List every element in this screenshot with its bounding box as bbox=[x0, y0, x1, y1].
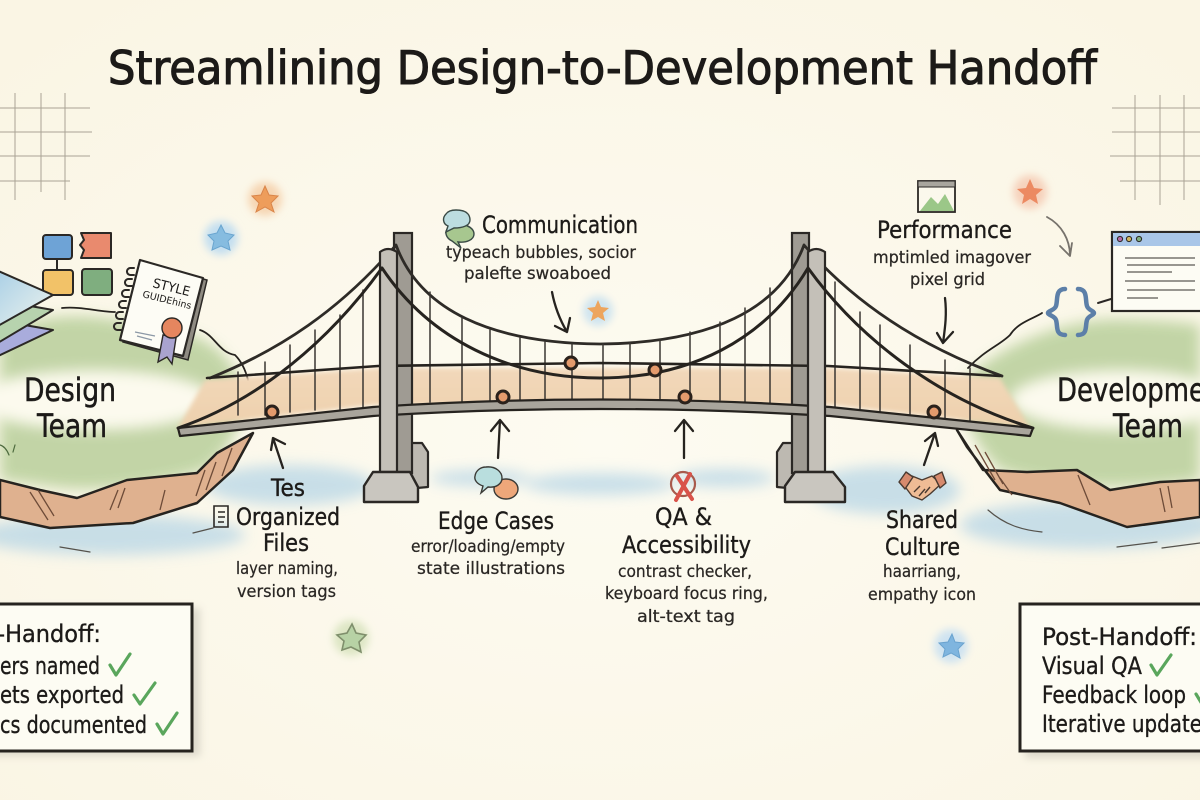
checkmarks bbox=[1151, 655, 1200, 704]
block: edge cases: error/loading/empty bbox=[411, 537, 565, 557]
arrows bbox=[271, 217, 1072, 468]
light patch behind Design Team bbox=[0, 370, 215, 430]
pencil grid: left bbox=[0, 93, 92, 200]
block: communication: typeach bubbles, socior bbox=[446, 243, 636, 263]
block: organized files: Tes bbox=[270, 474, 305, 502]
cliff left bbox=[0, 433, 253, 528]
grass wash right bbox=[964, 319, 1200, 487]
block: qa and accessibility bbox=[605, 503, 768, 627]
block: qa and accessibility: QA & bbox=[655, 503, 712, 531]
star: green bottom bbox=[333, 620, 369, 656]
rear main cable bbox=[210, 245, 1002, 378]
block: organized files: version tags bbox=[237, 582, 336, 602]
block: edge cases bbox=[411, 507, 565, 579]
icon: performance image bbox=[918, 181, 955, 212]
front main cable bbox=[178, 268, 1033, 428]
cliff hatching right bbox=[975, 445, 1172, 512]
coast outline left bbox=[62, 308, 248, 380]
block: edge cases: Edge Cases bbox=[438, 507, 554, 535]
block: performance bbox=[873, 216, 1031, 290]
icon: handshake bbox=[899, 472, 946, 500]
panel: post-handoff checklist: Post-Handoff: bbox=[1042, 623, 1197, 651]
block: communication: palefte swoaboed bbox=[464, 264, 611, 284]
block: qa and accessibility: Accessibility bbox=[622, 531, 751, 559]
icon: organized file bbox=[214, 506, 228, 527]
star: red-orange right bbox=[1013, 175, 1047, 209]
arrow: edge cases bbox=[491, 420, 509, 458]
icon: style guide notebook bbox=[114, 260, 207, 364]
block: qa and accessibility: alt-text tag bbox=[637, 607, 735, 627]
star: blue top bbox=[204, 221, 238, 255]
grass wash left bbox=[0, 316, 241, 489]
callout nodes bbox=[266, 357, 940, 418]
block: qa and accessibility: keyboard focus ring, bbox=[605, 584, 768, 604]
pencil grid: right bbox=[1110, 95, 1200, 205]
deck surface bbox=[178, 368, 1030, 428]
block: shared culture: Shared bbox=[886, 506, 958, 534]
arrow: qa accessibility bbox=[675, 420, 693, 458]
label: design team bbox=[24, 371, 116, 445]
block: shared culture bbox=[868, 506, 976, 605]
label: development team: Team bbox=[1112, 407, 1183, 445]
block: organized files: layer naming, bbox=[236, 559, 338, 579]
block: performance: Performance bbox=[877, 216, 1012, 244]
roadway beam bbox=[178, 400, 1033, 436]
ribbon seal bbox=[158, 335, 176, 364]
tower bases bbox=[364, 472, 845, 502]
block: communication bbox=[446, 211, 638, 284]
panel: pre-handoff checklist: cs documented bbox=[0, 711, 147, 739]
cliff right bbox=[957, 430, 1200, 527]
cliff hatching left bbox=[30, 448, 232, 520]
grass tuft left bbox=[0, 445, 15, 455]
label: development team bbox=[1057, 371, 1200, 445]
rear tower bases bbox=[395, 443, 808, 490]
block: communication: Communication bbox=[482, 211, 638, 239]
icon: developer browser window bbox=[1098, 232, 1200, 311]
notebook title: STYLE bbox=[151, 276, 192, 300]
front towers bbox=[380, 249, 825, 472]
icon: style guide notebook: GUIDEhins bbox=[141, 289, 192, 312]
ripples left bbox=[60, 528, 213, 552]
star: orange center bbox=[583, 296, 613, 326]
block: shared culture: haarriang, bbox=[883, 562, 961, 582]
block: shared culture: empathy icon bbox=[868, 585, 976, 605]
arrow: performance bbox=[937, 298, 953, 343]
spiral binding bbox=[114, 268, 134, 330]
suspension bridge bbox=[178, 233, 1033, 502]
top rail bbox=[207, 363, 1000, 378]
block: performance: mptimled imagover bbox=[873, 248, 1031, 268]
panel: post-handoff checklist bbox=[1020, 604, 1200, 758]
panel: pre-handoff checklist: -Handoff: bbox=[0, 620, 101, 648]
panel: pre-handoff checklist: ets exported bbox=[0, 681, 124, 709]
block: edge cases: state illustrations bbox=[417, 559, 565, 579]
arrow: communication bbox=[552, 292, 570, 332]
block: organized files: Files bbox=[263, 529, 309, 557]
label: design team: Design bbox=[24, 371, 116, 409]
block: organized files bbox=[236, 474, 340, 602]
icon: chat bubbles edge cases bbox=[475, 467, 518, 499]
light patch behind Development Team bbox=[1010, 370, 1200, 430]
icon: curly braces bbox=[1048, 289, 1094, 335]
panel: pre-handoff checklist: ers named bbox=[0, 652, 100, 680]
coast outline right bbox=[968, 313, 1042, 368]
rear towers bbox=[394, 233, 809, 473]
star: orange top bbox=[248, 182, 282, 216]
arrow: organized files bbox=[271, 438, 285, 468]
label: design team: Team bbox=[36, 407, 107, 445]
icon: accessibility ribbon bbox=[671, 472, 695, 500]
checkmarks bbox=[110, 654, 177, 734]
arrow: shared culture bbox=[924, 433, 938, 465]
block: performance: pixel grid bbox=[910, 270, 985, 290]
left island bbox=[0, 308, 253, 552]
icon: chat bubbles communication bbox=[444, 210, 474, 248]
title: Streamlining Design-to-Development Handoff bbox=[108, 41, 1098, 95]
hangers bbox=[238, 282, 970, 422]
right island bbox=[957, 313, 1200, 548]
panel: pre-handoff checklist bbox=[0, 604, 200, 756]
icon: design swatches bbox=[43, 233, 112, 295]
ripples right bbox=[988, 510, 1200, 548]
icon: stacked layers bbox=[0, 270, 53, 357]
block: qa and accessibility: contrast checker, bbox=[618, 562, 752, 582]
star: blue bottom bbox=[934, 629, 968, 663]
water wash under bridge bbox=[0, 465, 1200, 555]
block: organized files: Organized bbox=[236, 503, 340, 531]
panel: post-handoff checklist: Visual QA bbox=[1042, 652, 1143, 680]
arrow: grey star bbox=[1047, 217, 1072, 256]
block: shared culture: Culture bbox=[885, 533, 960, 561]
